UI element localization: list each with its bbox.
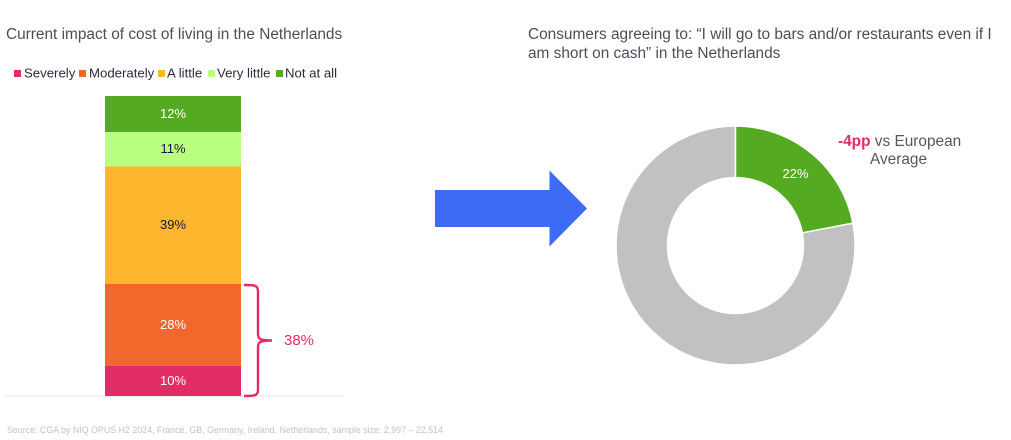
bracket [244,285,272,396]
legend: A little [167,66,202,80]
donut label: 22% [782,166,809,181]
segment: severely 10%: 10% [160,373,186,388]
segment: moderately 28% [105,284,241,366]
callout: vs European average: Average [870,151,927,168]
title: cost of living: Current impact of cost of living in the Netherlands [6,26,342,43]
bracket label: 38%: 38% [284,332,314,349]
segment: moderately 28%: 28% [160,317,186,332]
callout: vs European average: -4pp vs European [838,133,961,150]
stacked bar chart [105,96,241,396]
donut segment: 22% [736,126,853,233]
segment: not at all 12% [105,96,241,132]
legend: Severely [24,66,76,80]
title: bars and restaurants: Consumers agreeing to: “I will go to bars and/or restaurants even if I [528,26,992,43]
legend: Not at all [285,66,337,80]
legend [14,66,337,80]
segment: severely 10% [105,366,241,396]
segment: a little 39% [105,166,241,284]
segment: not at all 12%: 12% [160,106,186,121]
donut chart [616,126,855,365]
arrow [435,170,587,246]
title: bars and restaurants: am short on cash” in the Netherlands [528,45,781,62]
baseline [4,396,344,397]
segment: very little 11%: 11% [160,141,186,156]
legend: Moderately [89,66,155,80]
legend: Very little [217,66,271,80]
segment: a little 39%: 39% [160,217,186,232]
donut segment: remainder [616,126,855,365]
segment: very little 11% [105,132,241,166]
source note: Source: CGA by NIQ OPUS H2 2024, France, GB, Germany, Ireland, Netherlands, sample size: 2,997 – 22,514 [7,425,443,435]
